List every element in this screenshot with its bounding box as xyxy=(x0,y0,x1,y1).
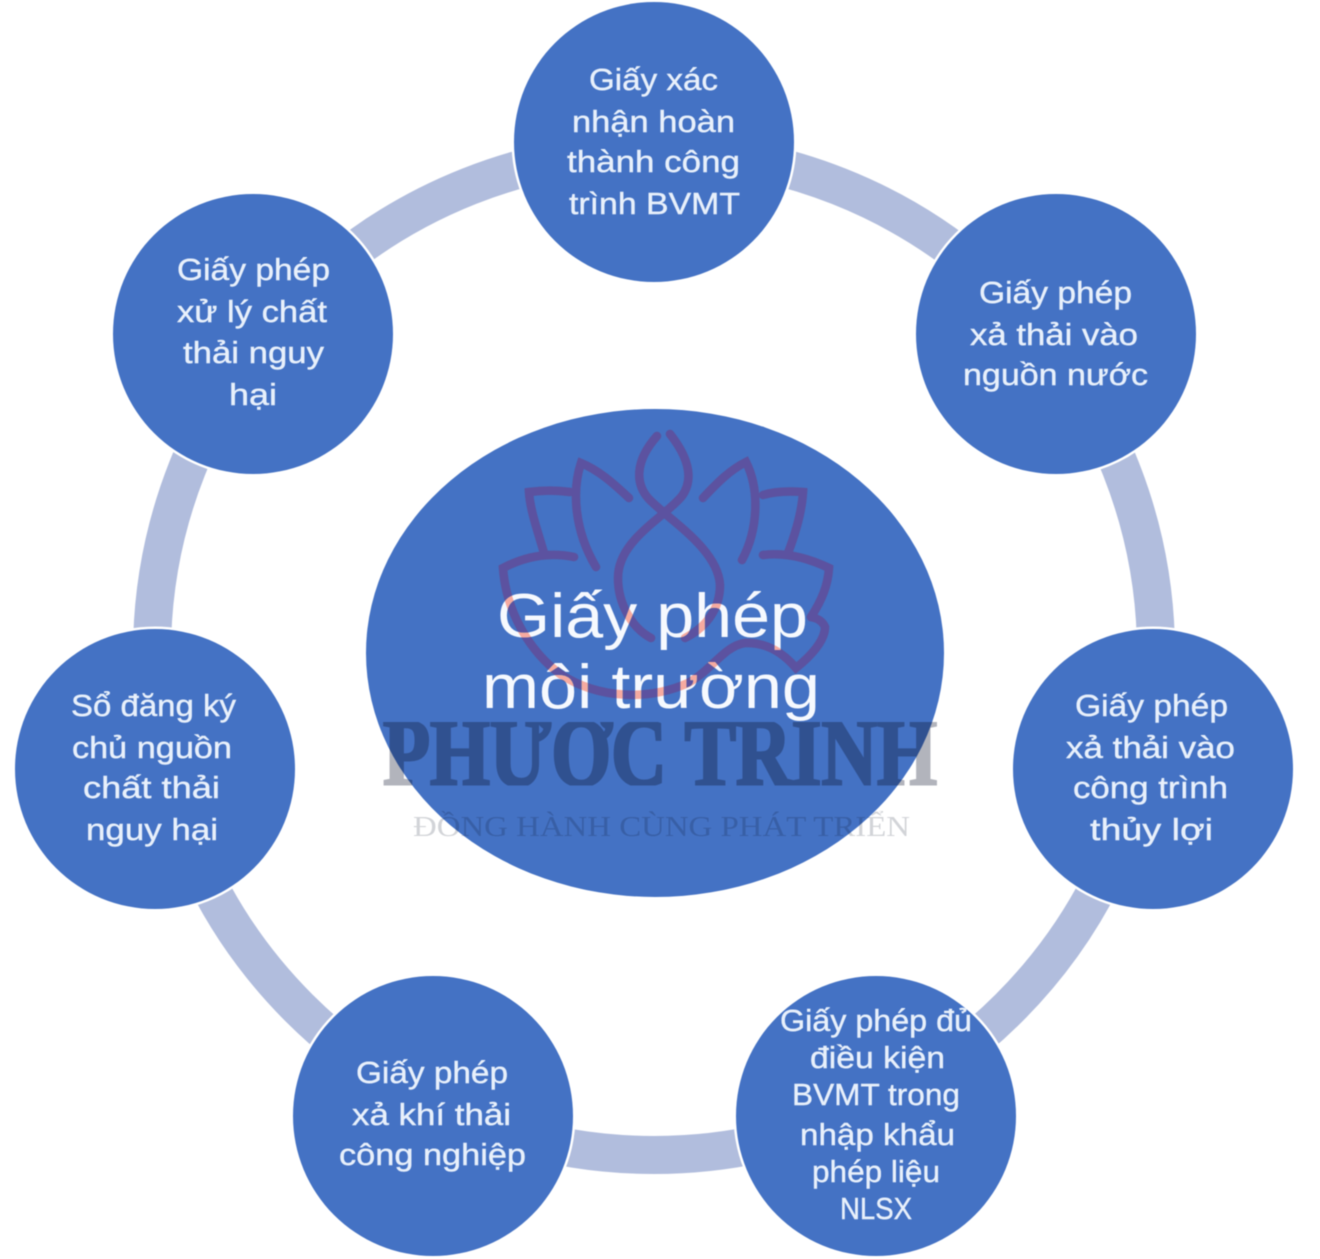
node: Sổ đăng ký chủ nguồn chất thải nguy hại xyxy=(15,629,295,909)
node: Giấy phép xả thải vào nguồn nước xyxy=(916,194,1196,474)
node: Giấy phép xử lý chất thải nguy hại: hại xyxy=(229,377,277,412)
node: Sổ đăng ký chủ nguồn chất thải nguy hại: Sổ đăng ký xyxy=(71,688,237,723)
node: Giấy phép xả thải vào nguồn nước: nguồn nước xyxy=(963,357,1148,392)
node: Sổ đăng ký chủ nguồn chất thải nguy hại: chất thải xyxy=(83,770,220,805)
node: Giấy phép đủ điều kiện BVMT trong nhập khẩu phép liệu NLSX: điều kiện xyxy=(810,1040,945,1075)
node: Giấy xác nhận hoàn thành công trình BVMT: trình BVMT xyxy=(569,186,740,221)
watermark: company name: PHƯỚC TRÌNH xyxy=(383,699,937,806)
watermark: slogan: ĐỒNG HÀNH CÙNG PHÁT TRIỂN xyxy=(413,811,910,843)
node: Giấy phép xả khí thải công nghiệp xyxy=(293,976,573,1256)
center title: Giấy phép môi trường xyxy=(482,582,820,722)
node: Giấy phép xả khí thải công nghiệp: xả khí thải xyxy=(352,1097,511,1132)
watermark: lotus logo xyxy=(503,434,829,695)
node: Giấy xác nhận hoàn thành công trình BVMT: thành công xyxy=(567,144,740,179)
node: Giấy phép xả thải vào nguồn nước: xả thải vào xyxy=(970,317,1138,352)
node: Giấy phép xả thải vào nguồn nước: Giấy phép xyxy=(979,275,1132,310)
node: Giấy phép xả thải vào công trình thủy lợi: thủy lợi xyxy=(1090,812,1213,847)
node: Giấy phép xả khí thải công nghiệp: Giấy phép xyxy=(356,1055,508,1090)
node: Sổ đăng ký chủ nguồn chất thải nguy hại: chủ nguồn xyxy=(72,730,232,765)
node: Giấy xác nhận hoàn thành công trình BVMT: Giấy xác xyxy=(589,62,718,97)
node: Giấy xác nhận hoàn thành công trình BVMT: nhận hoàn xyxy=(572,104,735,139)
node: Giấy phép đủ điều kiện BVMT trong nhập khẩu phép liệu NLSX: nhập khẩu xyxy=(800,1117,955,1152)
connecting ring xyxy=(152,151,1156,1155)
node: Giấy phép xử lý chất thải nguy hại xyxy=(113,194,393,474)
node: Giấy phép xử lý chất thải nguy hại: Giấy phép xyxy=(177,252,330,287)
node: Giấy phép xả thải vào công trình thủy lợi xyxy=(1013,629,1293,909)
center title: Giấy phép môi trường: môi trường xyxy=(482,653,820,722)
node: Giấy phép xử lý chất thải nguy hại: xử lý chất xyxy=(177,294,327,329)
node: Giấy phép xả thải vào công trình thủy lợi: Giấy phép xyxy=(1075,688,1228,723)
node: Giấy phép xử lý chất thải nguy hại: thải nguy xyxy=(183,335,325,370)
node: Giấy phép đủ điều kiện BVMT trong nhập khẩu phép liệu NLSX: phép liệu xyxy=(812,1154,940,1189)
node: Giấy xác nhận hoàn thành công trình BVMT xyxy=(514,2,794,282)
node: Giấy phép xả thải vào công trình thủy lợi: công trình xyxy=(1073,770,1228,805)
center circle xyxy=(366,409,944,897)
center title: Giấy phép môi trường: Giấy phép xyxy=(497,582,808,651)
node: Giấy phép đủ điều kiện BVMT trong nhập khẩu phép liệu NLSX: BVMT trong xyxy=(792,1077,960,1112)
node: Giấy phép xả thải vào công trình thủy lợi: xả thải vào xyxy=(1066,730,1235,765)
node: Giấy phép đủ điều kiện BVMT trong nhập khẩu phép liệu NLSX: NLSX xyxy=(840,1191,912,1226)
node: Giấy phép xả khí thải công nghiệp: công nghiệp xyxy=(339,1137,526,1172)
node: Giấy phép đủ điều kiện BVMT trong nhập khẩu phép liệu NLSX: Giấy phép đủ xyxy=(780,1003,972,1038)
watermark: lotus tint over title xyxy=(503,434,829,695)
node: Sổ đăng ký chủ nguồn chất thải nguy hại: nguy hại xyxy=(86,812,218,847)
node: Giấy phép đủ điều kiện BVMT trong nhập khẩu phép liệu NLSX xyxy=(736,976,1016,1256)
